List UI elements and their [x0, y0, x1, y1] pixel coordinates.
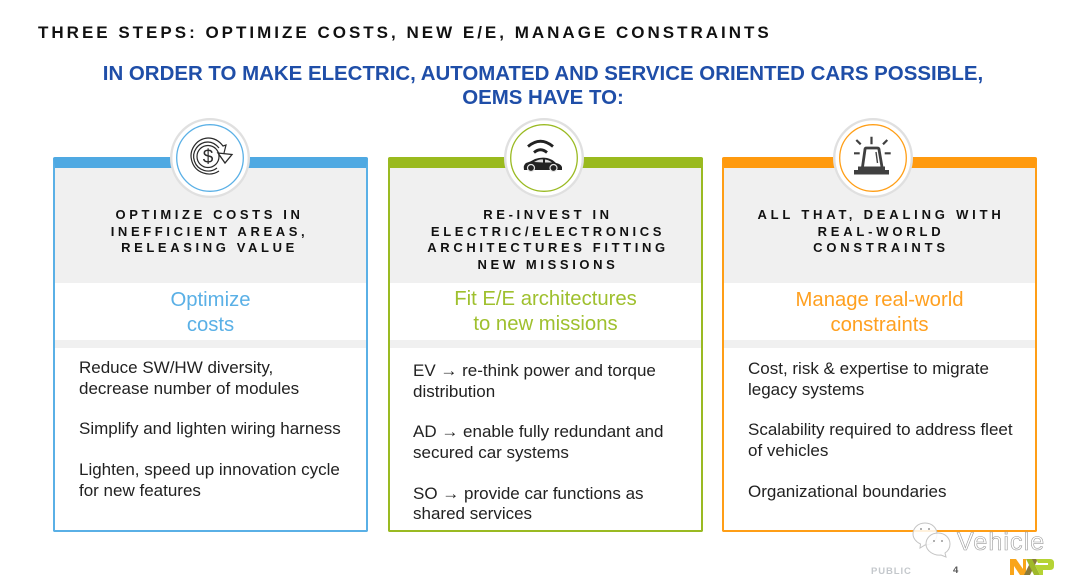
- panel heading: real-world constraints: CONSTRAINTS: [813, 240, 949, 255]
- text block: fit E/E list: distribution: [413, 382, 495, 400]
- panel heading: re-invest: RE-INVEST IN: [483, 207, 613, 222]
- subheading: optimize costs: Optimize: [170, 289, 251, 311]
- panel heading: real-world constraints: REAL-WORLD: [818, 224, 944, 238]
- subheading: manage constraints: Manage real-world: [796, 289, 963, 311]
- text block: constraints list: legacy systems: [748, 380, 864, 398]
- panel: fit E/E architectures: [388, 157, 703, 532]
- text block: optimize costs list: Simplify and lighten wiring harness: [79, 419, 341, 438]
- text block: fit E/E list: shared services: [413, 504, 532, 523]
- footer: page number: 4: [953, 565, 958, 576]
- subheading: optimize costs: costs: [187, 314, 234, 336]
- text block: constraints list: Organizational boundaries: [748, 482, 946, 501]
- footer: classification: PUBLIC: [871, 566, 912, 577]
- subheading: manage constraints: [796, 289, 963, 336]
- panel heading: real-world constraints: ALL THAT, DEALING WITH: [757, 207, 1005, 222]
- panel heading: re-invest: NEW MISSIONS: [478, 256, 618, 272]
- text block: constraints list: of vehicles: [748, 441, 828, 460]
- text block: constraints list: Cost, risk & expertise to migrate: [748, 359, 989, 378]
- text block: optimize costs list: Reduce SW/HW diversity,: [79, 358, 273, 377]
- subtitle: [103, 62, 983, 109]
- icon: dollar cycle: $: [203, 147, 214, 168]
- panel: optimize costs: [53, 157, 368, 532]
- panel heading: optimize costs: RELEASING VALUE: [121, 240, 298, 255]
- title: THREE STEPS: OPTIMIZE COSTS, NEW E/E, MANAGE CONSTRAINTS: [38, 23, 772, 42]
- subheading: optimize costs: [170, 289, 251, 336]
- panel heading: optimize costs: OPTIMIZE COSTS IN: [116, 207, 303, 222]
- icon: connected car: [504, 118, 584, 198]
- text block: fit E/E list: [413, 361, 663, 523]
- text block: optimize costs list: decrease number of modules: [79, 378, 299, 398]
- panel heading: re-invest: ARCHITECTURES FITTING: [427, 240, 669, 255]
- text block: optimize costs list: [79, 358, 341, 500]
- watermark: [912, 522, 1045, 558]
- panel: manage constraints: [722, 157, 1037, 532]
- logo: NXP: [1010, 559, 1054, 575]
- text block: fit E/E list: EV → re-think power and torque: [413, 361, 656, 380]
- panel heading: re-invest: [427, 207, 669, 272]
- subtitle: IN ORDER TO MAKE ELECTRIC, AUTOMATED AND SERVICE ORIENTED CARS POSSIBLE,: [103, 62, 983, 85]
- panel heading: optimize costs: INEFFICIENT AREAS,: [111, 224, 308, 238]
- panel heading: optimize costs: [111, 207, 308, 255]
- subheading: fit E/E: to new missions: [473, 313, 618, 335]
- text block: constraints list: [748, 359, 1013, 501]
- text block: optimize costs list: for new features: [79, 481, 201, 500]
- subtitle: OEMS HAVE TO:: [462, 86, 624, 109]
- subheading: fit E/E: [454, 288, 637, 335]
- subheading: manage constraints: constraints: [830, 314, 929, 336]
- text block: optimize costs list: Lighten, speed up innovation cycle: [79, 460, 340, 479]
- icon: dollar cycle: [170, 118, 250, 198]
- text block: fit E/E list: secured car systems: [413, 443, 569, 462]
- watermark: Vehicle: [957, 528, 1045, 556]
- text block: fit E/E list: SO → provide car functions as: [413, 484, 644, 503]
- panel heading: re-invest: ELECTRIC/ELECTRONICS: [431, 224, 665, 238]
- panel heading: real-world constraints: [757, 207, 1005, 255]
- text block: constraints list: Scalability required to address fleet: [748, 420, 1013, 439]
- icon: alarm beacon: [833, 118, 913, 198]
- text block: fit E/E list: AD → enable fully redundant and: [413, 422, 663, 441]
- subheading: fit E/E: Fit E/E architectures: [454, 288, 637, 310]
